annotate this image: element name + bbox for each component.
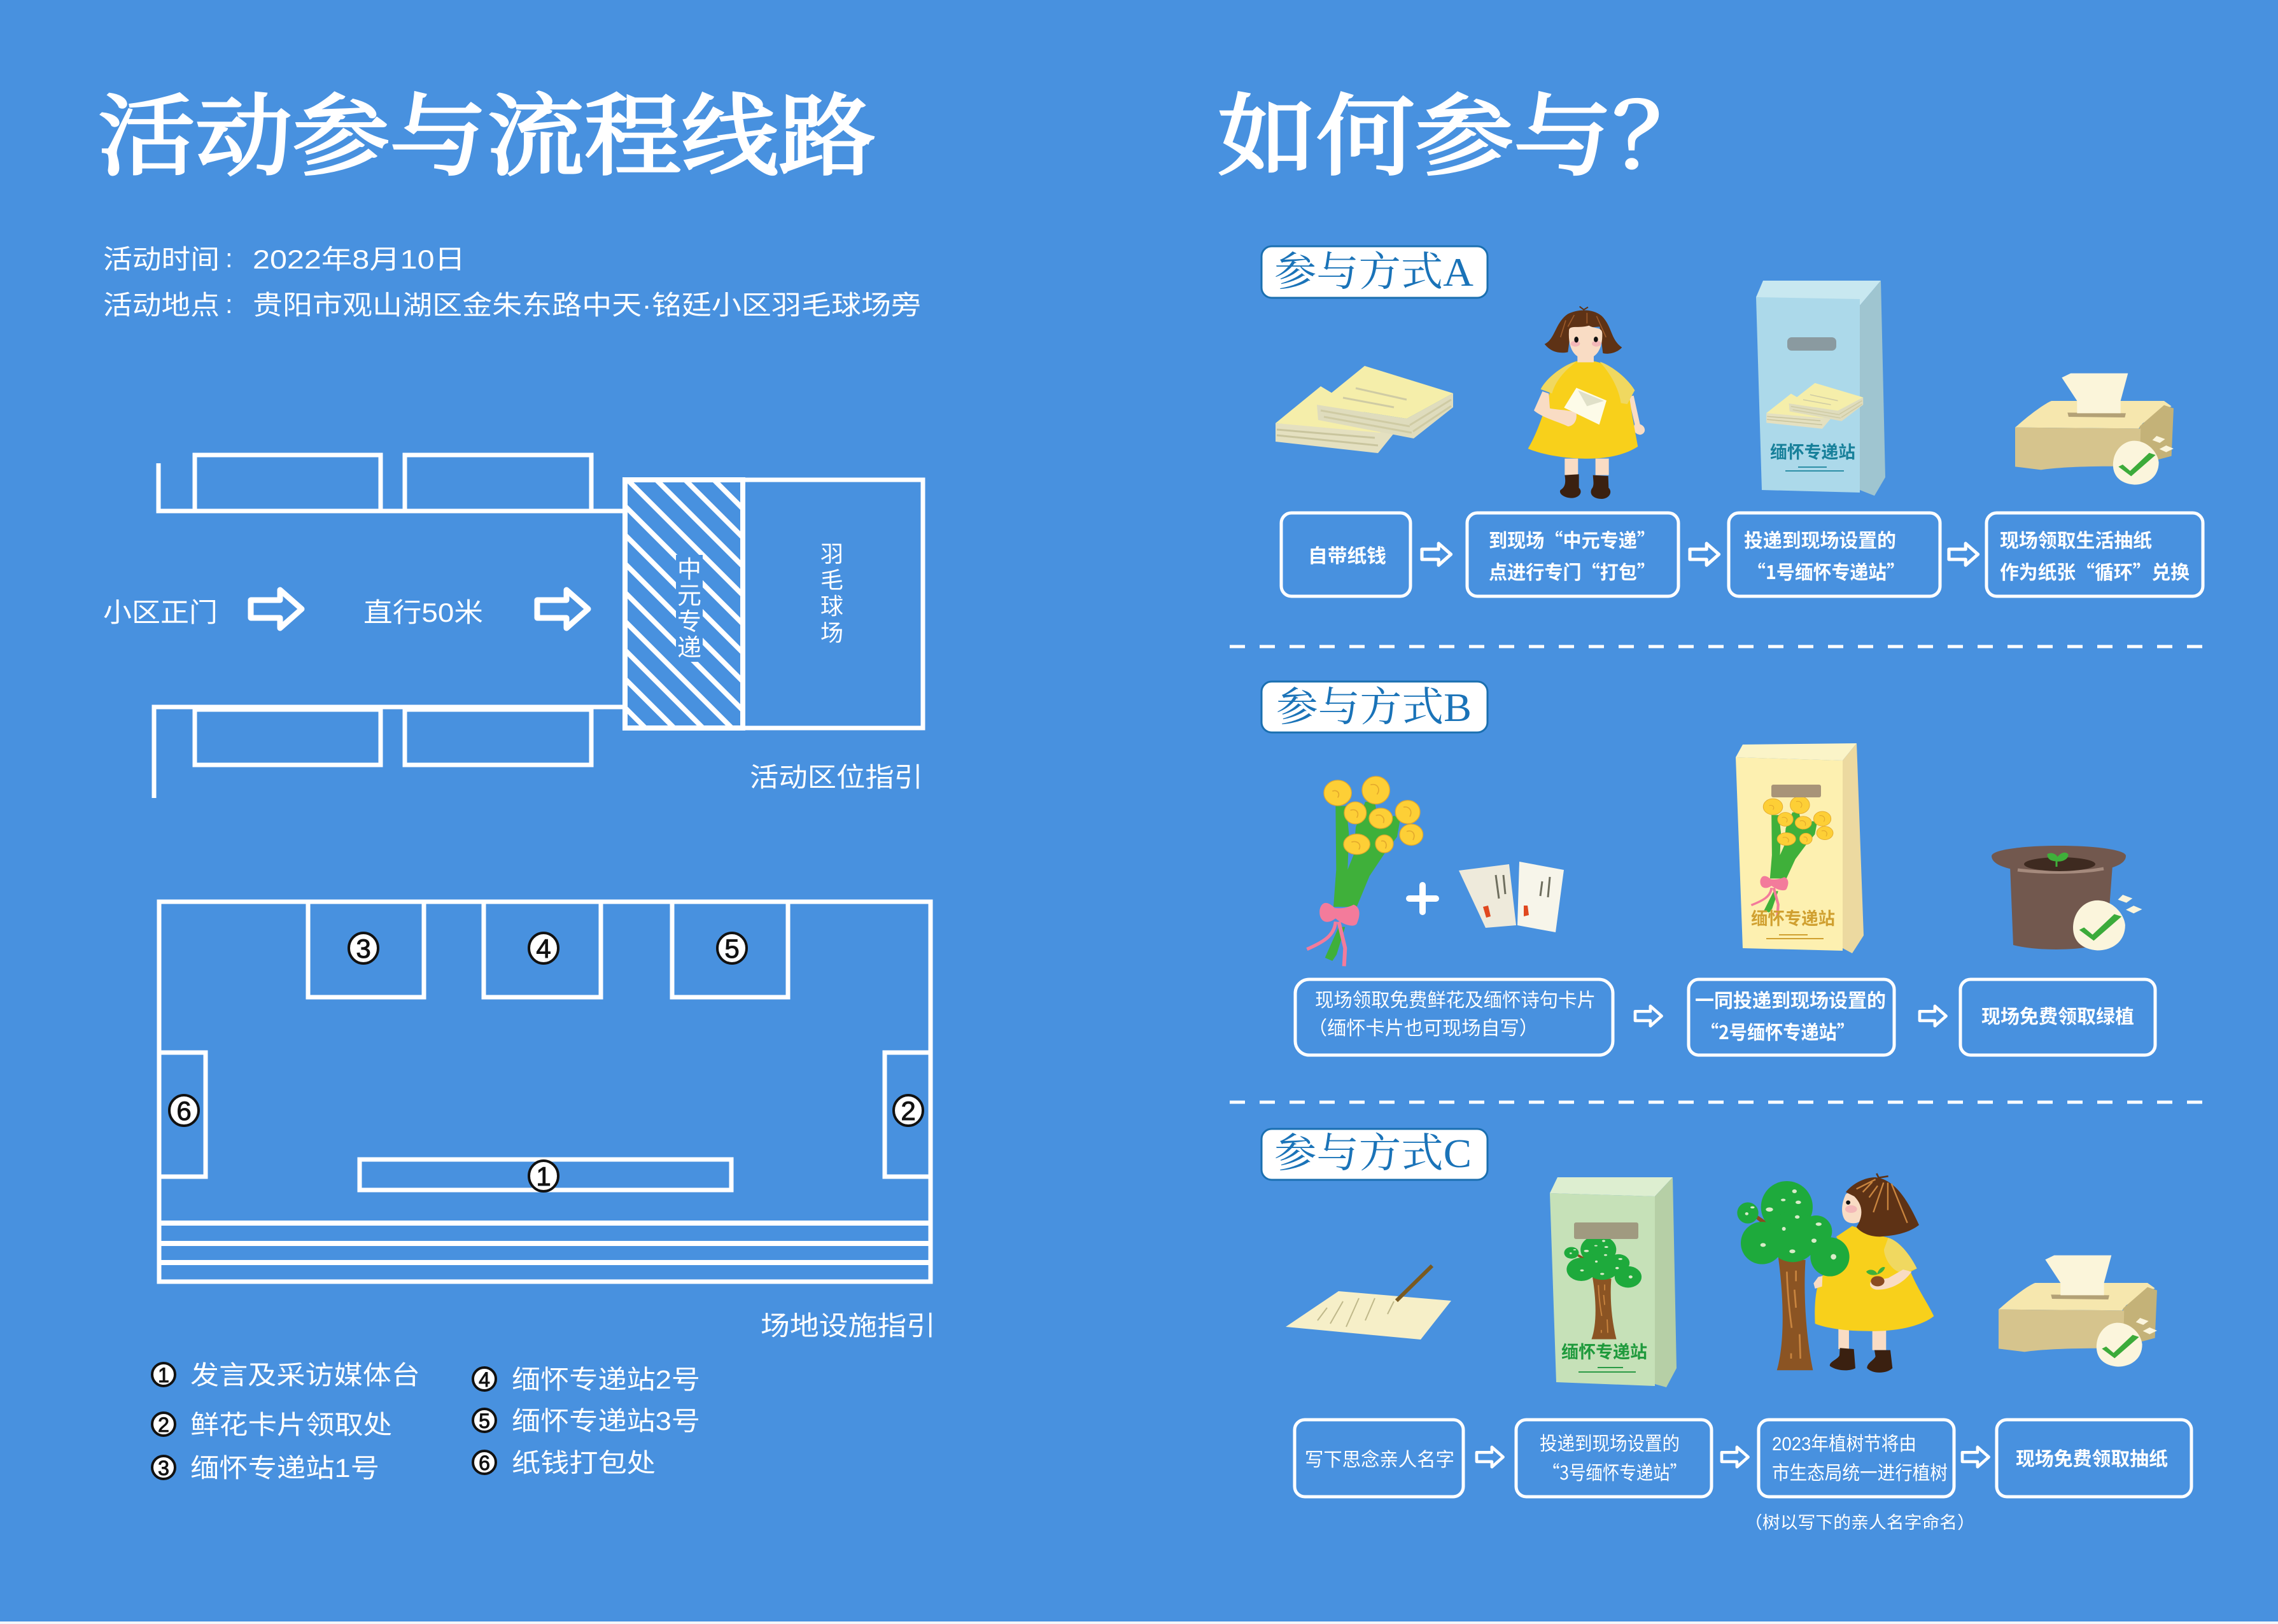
legend item 2: 2 [158,1413,169,1436]
badminton court: 羽 [820,541,843,567]
legend item 4: 缅怀专递站2号 [512,1365,700,1394]
step box: bring paper money [1281,513,1410,596]
venue outline and steps [158,902,931,1282]
step box: deliver to station 3 [1516,1420,1712,1497]
event info text: 贵阳市观山湖区金朱东路中天·铭廷小区羽毛球场旁 [253,290,921,320]
badminton court [743,480,923,728]
hatched zone: Zhongyuan delivery: 中 [677,557,701,584]
icon: green delivery station: 缅怀专递站 [1561,1343,1647,1362]
panel: method B [1262,682,2155,1055]
badminton court: 毛 [820,567,843,593]
note: tree naming: （树以写下的亲人名字命名） [1745,1509,1975,1534]
step box: deliver to station 2: “2号缅怀专递站” [1701,1017,1855,1045]
box 2 [885,1053,931,1177]
event info text: 活动时间 [103,244,220,274]
title: route: 活动参与流程线路 [98,88,876,187]
step box: collect tissue: 现场领取生活抽纸 [2000,531,2152,552]
caption: facility guide: 场地设施指引 [761,1311,936,1341]
box 2: 2 [901,1096,916,1126]
badminton court: 球 [820,593,843,619]
step box: free tissue [1997,1420,2191,1497]
icon: memorial cards [1459,862,1564,932]
badge C: 参与方式C [1274,1131,1472,1176]
legend item 4: 4 [479,1368,490,1391]
box 4: 4 [536,934,551,963]
box 4 [484,902,601,997]
icon: blue delivery station: 缅怀专递站 [1770,443,1855,462]
badge B: 参与方式B [1276,685,1472,730]
event info text: : [225,243,233,273]
step box: pack at Zhongyuan delivery: 点进行专门“打包” [1489,557,1656,585]
icon: potted seedling [1992,846,2142,951]
step box: deliver to station 3: 投递到现场设置的 [1540,1434,1680,1455]
step box: pack at Zhongyuan delivery [1467,513,1678,596]
step box: deliver to station 2 [1689,979,1894,1055]
box 6: 6 [176,1096,192,1126]
box 1: 1 [536,1161,551,1191]
event info text: 2022年8月10日 [253,244,465,274]
box 1 [360,1159,731,1191]
step box: free plant: 现场免费领取绿植 [1981,1007,2134,1028]
step box: deliver to station 2: 一同投递到现场设置的 [1695,991,1886,1012]
legend [152,1361,700,1483]
arrow [1635,1006,1662,1026]
legend item 1: 1 [158,1364,169,1387]
icon: tissue box with check [2015,374,2174,485]
arrow [1477,1447,1503,1467]
arrow [1722,1447,1748,1467]
caption: area guide: 活动区位指引 [750,762,923,792]
step box: free flowers and card [1295,979,1613,1055]
step box: write name: 写下思念亲人名字 [1305,1450,1454,1471]
step box: bring paper money: 自带纸钱 [1308,546,1386,567]
step box: deliver to station 1 [1729,513,1940,596]
icon: tissue box with check [1999,1256,2157,1367]
event info text: 活动地点 [103,290,220,320]
arrow [537,590,588,628]
arrow [1962,1447,1989,1467]
arrow [251,590,302,628]
arrow [1690,543,1719,565]
step box: free tissue: 现场免费领取抽纸 [2016,1449,2168,1470]
step box: free plant [1960,979,2155,1055]
legend item 1: 发言及采访媒体台 [190,1361,420,1390]
icon: yellow delivery station [1736,743,1864,953]
icon: green delivery station [1550,1177,1677,1387]
hatched zone: Zhongyuan delivery [625,480,743,728]
box 5: 5 [724,934,740,963]
hatched zone: Zhongyuan delivery: 递 [677,635,701,662]
straight 50m label: 直行50米 [363,598,483,627]
legend item 6: 纸钱打包处 [512,1448,656,1478]
upper buildings [158,455,624,511]
community gate label: 小区正门 [103,598,218,627]
step box: write name [1295,1420,1463,1497]
step box: deliver to station 1: 投递到现场设置的 [1744,531,1896,552]
panel: method A [1262,246,2203,596]
legend item 5: 缅怀专递站3号 [512,1406,700,1436]
step box: deliver to station 1: “1号缅怀专递站” [1747,557,1905,585]
box 5 [672,902,788,997]
legend item 3: 缅怀专递站1号 [190,1453,379,1483]
legend item 3: 3 [158,1457,169,1480]
icon: paper money stacks [1276,366,1453,453]
step box: collect tissue: 作为纸张“循环”兑换 [2000,557,2190,585]
icon: yellow delivery station: 缅怀专递站 [1751,909,1835,928]
icon: girl holding envelope [1528,307,1645,499]
icon: flower bouquet [1307,776,1423,966]
icon: blue delivery station [1756,281,1885,496]
badge A: 参与方式A [1274,249,1473,295]
icon: girl with tree [1737,1173,1934,1373]
arrow [1422,543,1451,565]
lower buildings [154,707,624,798]
step box: tree planting: 2023年植树节将由 [1772,1434,1916,1455]
event info text: : [225,289,233,319]
map: activity area guide [103,455,923,798]
icon: plus [1409,885,1436,912]
box 6 [159,1053,206,1177]
step box: pack at Zhongyuan delivery: 到现场“中元专递” [1489,525,1656,553]
step box: collect tissue [1986,513,2203,596]
legend item 6: 6 [479,1452,490,1474]
badminton court: 场 [820,620,843,646]
step box: deliver to station 3: “3号缅怀专递站” [1543,1457,1687,1485]
box 3: 3 [356,934,371,963]
step box: tree planting [1759,1420,1954,1497]
legend item 5: 5 [479,1410,490,1432]
arrow [1949,543,1978,565]
step box: free flowers and card: （缅怀卡片也可现场自写） [1308,1012,1538,1040]
box 3 [308,902,424,997]
step box: free flowers and card: 现场领取免费鲜花及缅怀诗句卡片 [1315,990,1596,1011]
arrow [1920,1006,1946,1026]
event info text [103,243,921,320]
step box: tree planting: 市生态局统一进行植树 [1772,1463,1948,1484]
panel: method C [1262,1129,2191,1534]
hatched zone: Zhongyuan delivery: 专 [677,609,701,636]
map: venue facility guide [158,902,936,1341]
icon: paper and pen [1286,1266,1451,1340]
title: how to participate: 如何参与？ [1218,88,1711,187]
hatched zone: Zhongyuan delivery: 元 [677,583,701,610]
legend item 2: 鲜花卡片领取处 [190,1410,392,1439]
